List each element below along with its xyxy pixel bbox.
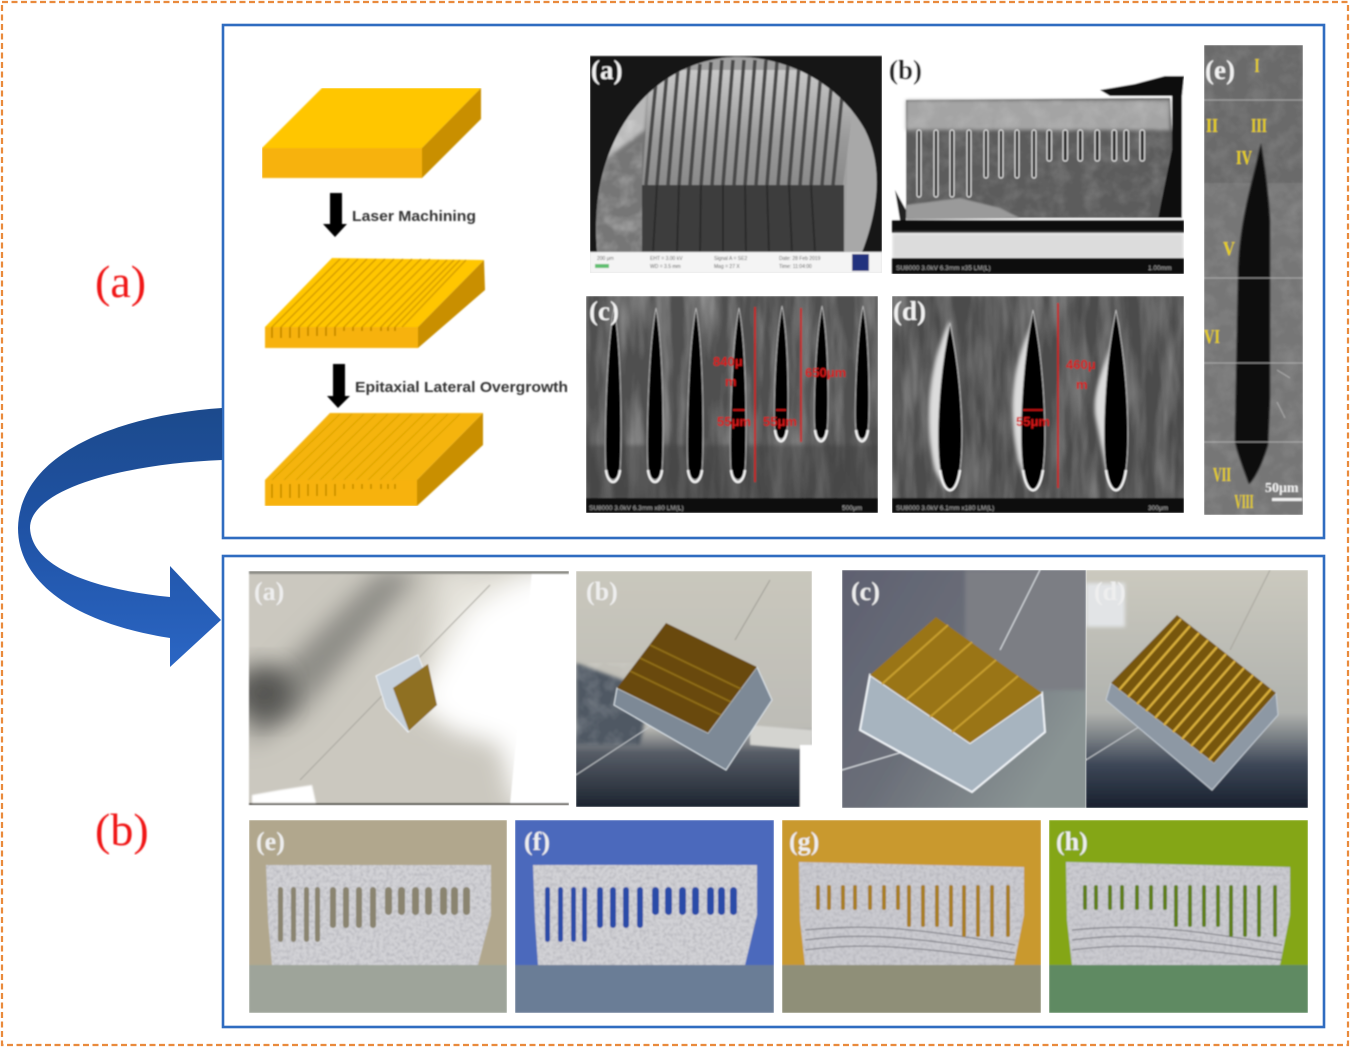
scale text: 50 μm: 50μm — [1265, 481, 1299, 496]
panel label: (h) — [1056, 827, 1088, 856]
caption bar — [590, 252, 882, 273]
arrow: laser machining step — [323, 193, 347, 237]
red measurement lines — [1023, 303, 1058, 488]
numeral V: V — [1223, 238, 1235, 260]
numeral IV: IV — [1236, 147, 1252, 169]
panel label: (c) — [589, 296, 619, 326]
chip — [266, 865, 491, 965]
red measurement lines — [733, 307, 801, 482]
caption: SU8000 3.0kV 6.3mm x80 LM(L) — [589, 505, 684, 512]
photo (d) — [1086, 570, 1308, 808]
label: section (b): (b) — [95, 804, 149, 855]
SEM image (b) — [889, 55, 1184, 274]
slots — [938, 310, 1128, 490]
measurement: 840 μm: 840μ — [713, 354, 743, 369]
caption: SU8000 3.0kV 6.3mm x35 LM(L) — [896, 265, 991, 272]
caption bar: Mag = 27 X — [714, 264, 740, 270]
caption bar: Time: 11:04:00 — [779, 264, 812, 270]
panel label: (b) — [586, 577, 618, 606]
caption bar: EHT = 3.00 kV — [650, 256, 683, 262]
SEM image (e) — [1204, 45, 1303, 515]
panel label: (e) — [1205, 55, 1235, 85]
chip — [614, 623, 772, 770]
numeral VI: VI — [1204, 326, 1220, 348]
process diagram — [262, 88, 568, 506]
photo (g) — [782, 820, 1041, 1013]
chip — [799, 862, 1024, 965]
numeral III: III — [1251, 115, 1267, 137]
chip — [376, 655, 437, 732]
slab: after overgrowth — [265, 413, 483, 506]
label: epitaxial lateral overgrowth: Epitaxial Lateral Overgrowth — [355, 379, 568, 396]
panel label: (d) — [1094, 577, 1126, 606]
measurement unit: m — [725, 374, 737, 389]
panel label: (d) — [893, 296, 926, 326]
measurement: 55 μm: 55μm — [717, 414, 751, 429]
panel: fabrication and SEM images — [223, 25, 1324, 538]
measurement: 650 μm: 650μm — [805, 365, 846, 380]
SEM image (d) — [892, 296, 1184, 513]
measurement: 55 μm: 55μm — [1016, 414, 1050, 429]
caption: SU8000 3.0kV 6.1mm x180 LM(L) — [896, 505, 994, 512]
chip — [533, 865, 757, 965]
scale bar — [1272, 498, 1302, 501]
panel label: (a) — [254, 577, 284, 606]
photo (h) — [1049, 820, 1308, 1013]
surface marks — [1277, 370, 1290, 418]
caption bar: Date: 28 Feb 2019 — [779, 256, 821, 262]
scale text: 300μm — [1148, 505, 1168, 512]
label: section (a): (a) — [95, 256, 146, 307]
label: laser machining: Laser Machining — [352, 208, 476, 225]
panel label: (c) — [851, 577, 880, 606]
arrow: overgrowth step — [327, 364, 350, 408]
photo (b) — [576, 571, 812, 807]
scale text: 1.00mm — [1148, 265, 1171, 272]
arrow: curved blue arrow from top panel to bottom panel — [18, 408, 222, 667]
measurement: 55 μm second: 55μm — [763, 414, 797, 429]
numeral VIII: VIII — [1234, 491, 1254, 513]
slots — [917, 130, 1144, 197]
numeral VII: VII — [1213, 464, 1231, 486]
panel label: (e) — [256, 827, 285, 856]
slab: bare substrate — [262, 88, 481, 178]
numeral II: II — [1206, 115, 1218, 137]
chip — [1066, 862, 1290, 965]
bright slot tips — [940, 470, 1126, 490]
chip — [1106, 615, 1278, 790]
measurement unit: m — [1076, 377, 1088, 392]
caption bar: Signal A = SE2 — [714, 256, 747, 262]
measurement: 460 μm: 460μ — [1066, 357, 1096, 372]
SEM image (a) — [590, 55, 882, 273]
chip — [860, 617, 1045, 792]
numeral I: I — [1254, 55, 1260, 77]
caption bar: WD = 3.5 mm — [650, 264, 681, 270]
photo (a) — [232, 571, 569, 806]
slab: laser machined grooves — [265, 258, 485, 348]
scale text: 500μm — [842, 505, 862, 512]
panel label: (f) — [524, 827, 550, 856]
photo (e) — [249, 820, 507, 1013]
slots — [605, 306, 869, 480]
caption bar: 200 μm — [597, 256, 614, 262]
panel: optical photographs — [223, 556, 1324, 1027]
panel label: (b) — [889, 55, 922, 85]
photo (c) — [842, 570, 1086, 808]
SEM image (c) — [586, 296, 878, 513]
bright slot tips — [606, 430, 868, 482]
panel label: (g) — [789, 827, 819, 856]
panel label: (a) — [591, 55, 622, 85]
photo (f) — [515, 820, 774, 1013]
